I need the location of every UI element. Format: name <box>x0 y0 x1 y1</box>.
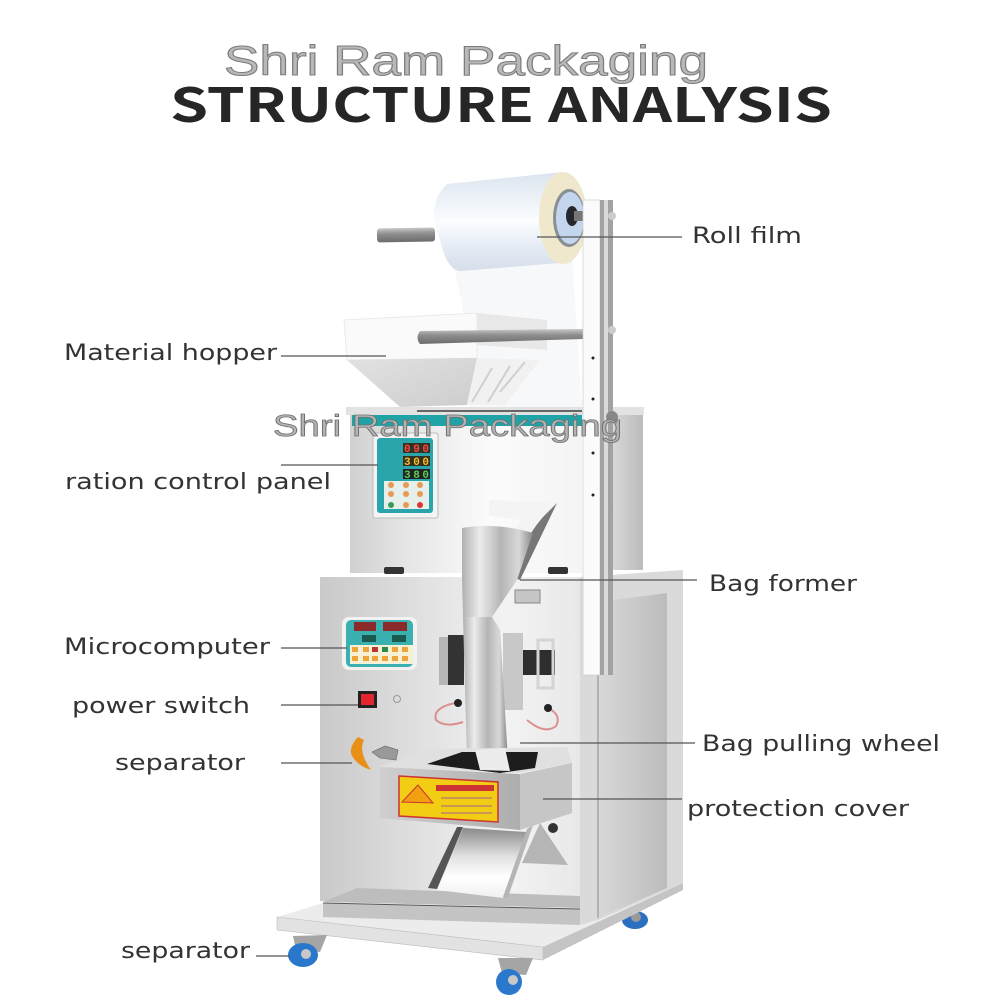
roll film <box>434 172 587 271</box>
power switch <box>358 691 377 708</box>
label: microcomputer: Microcomputer <box>64 635 271 660</box>
title: STRUCTURE ANALYSIS <box>170 67 832 136</box>
bag former bracket <box>515 590 540 603</box>
discharge chute <box>428 823 568 898</box>
microcomputer panel <box>342 617 417 670</box>
brand heading: Shri Ram Packaging <box>224 37 708 84</box>
label: ration control panel: ration control panel <box>65 470 331 495</box>
upper hopper rod <box>418 329 583 344</box>
shaft of roll <box>377 227 435 242</box>
leader lines <box>256 237 697 956</box>
label: roll film: Roll film <box>692 224 802 249</box>
warning label <box>399 776 498 822</box>
lower body side <box>580 570 683 925</box>
base plate <box>277 883 683 960</box>
upper weighing box <box>346 407 644 574</box>
material hopper <box>344 313 547 407</box>
vertical column <box>583 200 618 675</box>
indicator ring <box>394 696 400 702</box>
ration control panel: 090 <box>404 444 429 456</box>
ration control panel: 380 <box>404 470 429 482</box>
bag former <box>462 500 557 770</box>
kick panel <box>323 888 580 925</box>
label: separator bottom: separator <box>121 939 251 964</box>
caster wheel front <box>496 958 533 995</box>
label: bag former: Bag former <box>709 572 858 597</box>
label: protection cover: protection cover <box>687 797 910 822</box>
sealing jaws <box>435 633 558 729</box>
back roller <box>622 911 648 929</box>
ration control panel: 300 <box>404 457 429 469</box>
label: power switch: power switch <box>72 694 250 719</box>
label: bag pulling wheel: Bag pulling wheel <box>702 732 940 757</box>
machine illustration <box>277 172 683 995</box>
label: material hopper: Material hopper <box>64 341 278 366</box>
protection cover <box>380 747 572 830</box>
ration control panel <box>373 433 438 518</box>
side door panel <box>598 593 667 918</box>
separator lever <box>351 737 398 770</box>
label: separator: separator <box>115 751 246 776</box>
overlay brand watermark: Shri Ram Packaging <box>273 408 622 443</box>
caster wheel left <box>288 935 327 967</box>
lower body front <box>320 577 580 908</box>
film web falling from roll <box>452 255 582 410</box>
